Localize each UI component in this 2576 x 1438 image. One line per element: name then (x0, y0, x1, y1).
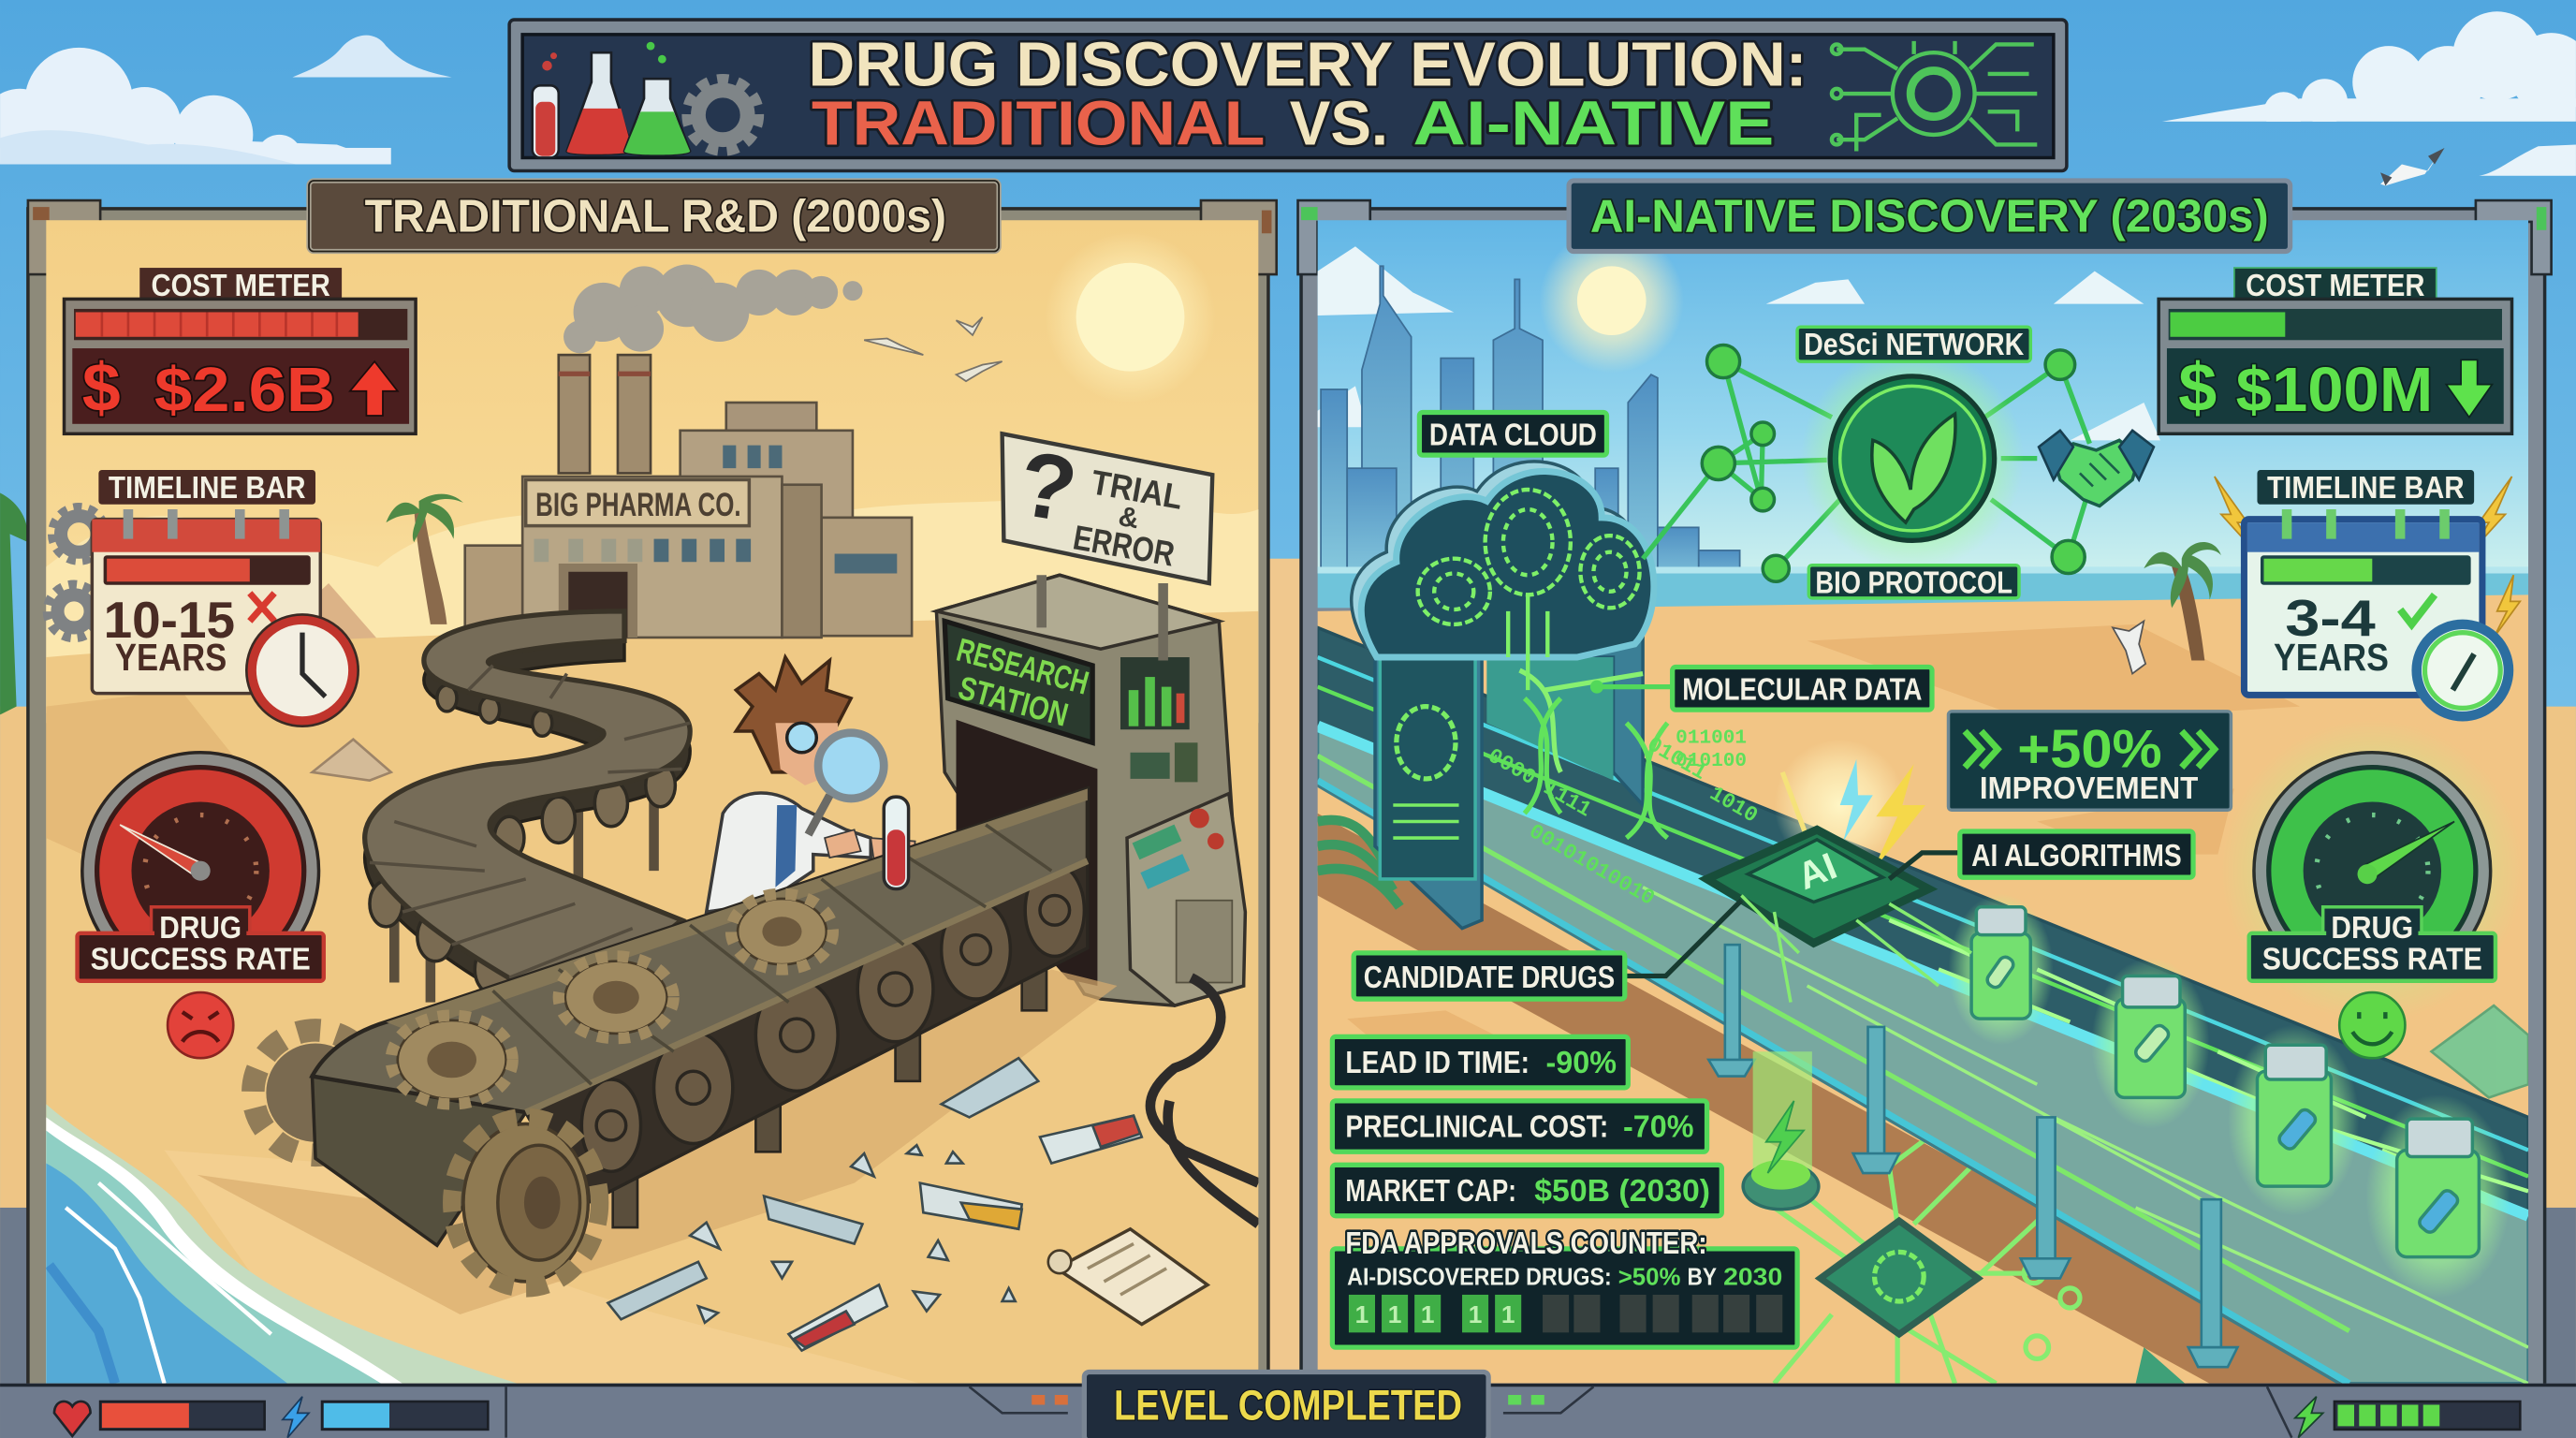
bar (2169, 309, 2502, 340)
glowing conveyor (1318, 627, 2528, 1384)
value: YEARS (115, 636, 227, 679)
icon: circuit chip (1832, 41, 2037, 151)
title banner (509, 20, 2067, 171)
label: molecular data (1590, 668, 1932, 710)
AI chip: AI (1792, 844, 1842, 898)
panel header: AI-native: AI-NATIVE DISCOVERY (2030s) (1590, 191, 2269, 242)
status bars (1120, 657, 1190, 729)
icon: seagull (2380, 148, 2445, 185)
stat: market cap: $50B (2030) (1534, 1174, 1710, 1209)
power cable (1150, 977, 1258, 1224)
data cloud server: 1010 (1705, 782, 1762, 829)
belt surface (1318, 627, 2528, 1212)
seagull (2113, 621, 2145, 674)
opening (956, 720, 1097, 986)
factory: Big Pharma Co. (465, 355, 912, 638)
broken vials and shards (607, 1058, 1142, 1351)
stat: lead ID time: -90% (1546, 1046, 1617, 1080)
icon: red X (250, 594, 274, 621)
bar (104, 555, 311, 585)
stat: market cap (1332, 1165, 1721, 1216)
stat: preclinical cost: PRECLINICAL COST: (1345, 1109, 1608, 1144)
energy bar (322, 1401, 488, 1430)
icon: green bolt (2295, 1397, 2323, 1438)
icon: smiling face (2339, 992, 2405, 1058)
value: $2.6B (154, 356, 335, 425)
counter cells: 1 (1469, 1300, 1482, 1328)
data cloud server (1318, 462, 1762, 929)
DNA helices (1525, 698, 1667, 838)
bar (2261, 555, 2471, 585)
title text: DRUG DISCOVERY EVOLUTION: (809, 30, 1808, 99)
rock (313, 740, 391, 781)
icon: bio protocol leaf coin (1801, 346, 2024, 570)
label: AI algorithms: AI ALGORITHMS (1971, 839, 2182, 873)
sea (1318, 566, 2528, 608)
research station machine (936, 575, 1245, 1005)
sand (1318, 594, 2528, 1384)
sky (1318, 220, 2528, 574)
value: 3-4 (2285, 590, 2376, 647)
gauge: AI-native success rate (2221, 720, 2524, 1058)
front gear (452, 1117, 600, 1288)
AI chip (1707, 829, 1971, 1003)
rear conveyor belt (365, 611, 707, 1030)
cost meter: traditional (65, 268, 416, 433)
icon: handshake (2039, 431, 2154, 506)
belt end (313, 1077, 526, 1245)
panel header: traditional (309, 181, 999, 252)
icon: clock (246, 614, 359, 726)
belt side with rollers (526, 861, 1088, 1208)
calendar (2244, 509, 2482, 695)
label: DeSci network: DeSci NETWORK (1804, 328, 2024, 362)
label: TIMELINE BAR (2267, 471, 2465, 506)
label: molecular data: MOLECULAR DATA (1682, 673, 1922, 708)
circuit traces on sand (1774, 1117, 2080, 1384)
energy capsule (1743, 1051, 1819, 1210)
stat: preclinical cost: -70% (1623, 1109, 1693, 1144)
sign: Big Pharma Co. (526, 479, 749, 526)
test tube (884, 797, 909, 888)
FDA approvals counter: FDA APPROVALS COUNTER: (1345, 1226, 1707, 1261)
desert sky (46, 220, 1258, 713)
sign: Trial & Error: ? (1012, 431, 1084, 542)
label: data cloud: DATA CLOUD (1429, 418, 1597, 453)
value: YEARS (2274, 636, 2389, 679)
callout: +50% improvement: +50% (2017, 720, 2162, 780)
label: SUCCESS RATE (2262, 942, 2482, 976)
counter cells: 1 (1388, 1300, 1401, 1328)
label: SUCCESS RATE (91, 942, 311, 976)
network lines: DeSci (1643, 361, 2089, 568)
value (104, 592, 235, 679)
icon: flasks and gear (533, 42, 759, 157)
rear gear (253, 1030, 378, 1155)
value: 10-15 (104, 592, 235, 649)
value (2167, 348, 2504, 426)
control panel (1127, 794, 1245, 1005)
FDA approvals counter: BY (1687, 1262, 1717, 1290)
icon: check (2400, 594, 2435, 624)
panel: AI-native discovery (1298, 200, 2552, 1388)
title banner: AI-NATIVE (1412, 89, 1774, 158)
data cloud (1352, 462, 1654, 690)
data cloud server: 00101010010 (1525, 819, 1659, 911)
sand ground (46, 611, 1258, 1384)
stat: lead ID time (1332, 1036, 1628, 1088)
level completed badge (1084, 1372, 1488, 1438)
icon: gears (48, 507, 105, 638)
counter cells: 1 (1421, 1300, 1434, 1328)
counter cells (1349, 1295, 1782, 1332)
bottom HUD bar (0, 1372, 2576, 1438)
level completed badge: LEVEL COMPLETED (1114, 1381, 1462, 1429)
panel frame (1298, 200, 2552, 1388)
sign: Big Pharma Co.: BIG PHARMA CO. (535, 487, 741, 523)
label: DRUG (2331, 911, 2413, 946)
data cloud server: 01011 (1643, 732, 1710, 785)
counter cells: 1 (1355, 1300, 1368, 1328)
value: $100M (2236, 356, 2433, 425)
FDA approvals counter: 2030 (1723, 1262, 1782, 1290)
FDA approvals counter: AI-DISCOVERED DRUGS: (1347, 1262, 1612, 1290)
neon streaks (1318, 657, 2528, 1212)
stat: market cap: MARKET CAP: (1345, 1174, 1516, 1209)
icon: clock (2417, 624, 2509, 716)
cyan rail (1318, 726, 2528, 1216)
clouds (1318, 246, 2160, 440)
sign: Trial & Error: TRIAL (1089, 462, 1186, 517)
rear belt shadow and side (365, 631, 707, 1030)
brain chip (1821, 1221, 1978, 1334)
title banner: TRADITIONAL (812, 89, 1265, 158)
sun (1054, 241, 1206, 391)
label: candidate drugs: CANDIDATE DRUGS (1364, 961, 1615, 995)
screen: Research Station: RESEARCH (953, 632, 1092, 702)
title banner: VS. (1290, 89, 1388, 158)
desert dunes (46, 493, 1258, 723)
scientist (707, 657, 915, 912)
gears on belt (398, 899, 827, 1099)
panel header: AI-native (1569, 181, 2291, 252)
label: TIMELINE BAR (109, 471, 305, 506)
label: COST METER (2246, 269, 2424, 303)
icon: sad face (168, 992, 233, 1058)
scroll (1048, 1229, 1208, 1325)
label: data cloud (1419, 413, 1606, 455)
label (2249, 907, 2496, 981)
health bar (100, 1401, 265, 1430)
brown belt shadow (1318, 814, 2365, 1384)
stat: preclinical cost (1332, 1101, 1707, 1152)
city skyline (1321, 266, 1740, 594)
icon: lightning bolts (2215, 477, 2520, 638)
smoke (564, 265, 862, 353)
data cloud server: 010100 (1676, 750, 1747, 772)
panel header: traditional: TRADITIONAL R&D (2000s) (365, 191, 946, 242)
gauge: traditional success rate (78, 753, 324, 1058)
value: $ (82, 348, 121, 426)
FDA approvals counter: >50% (1618, 1262, 1680, 1290)
lightning bolts (1774, 740, 1925, 871)
screen: Research Station: STATION (955, 669, 1072, 734)
counter cells: 1 (1501, 1300, 1515, 1328)
icon: network nodes (1702, 345, 2085, 581)
sign: Trial & Error (1003, 431, 1212, 661)
label: bio protocol: BIO PROTOCOL (1815, 566, 2012, 601)
vial glows (1949, 894, 2510, 1298)
callout: +50% improvement (1949, 712, 2231, 810)
value: $ (2178, 348, 2217, 426)
front conveyor belt (198, 788, 1117, 1314)
magnifying glass (809, 733, 884, 835)
panel frame (28, 200, 1277, 1388)
bar (74, 309, 407, 340)
vials (1971, 907, 2479, 1257)
cost meter: AI-native (2159, 268, 2511, 433)
sign: Trial & Error: & (1116, 501, 1141, 535)
needle (2365, 822, 2454, 877)
FDA approvals counter (1332, 1226, 1797, 1347)
value (72, 348, 409, 426)
label: COST METER (152, 269, 330, 303)
label (78, 907, 324, 981)
label: AI algorithms (1889, 831, 2193, 879)
panel: traditional R&D (28, 200, 1277, 1388)
palm tree (386, 494, 463, 624)
icon: heart (54, 1401, 91, 1436)
calendar (92, 509, 320, 694)
rear belt surface (365, 611, 690, 1010)
support pillars (1708, 945, 2237, 1367)
sun (1540, 228, 1684, 373)
timeline bar: traditional (48, 470, 359, 726)
AI progress bar (2334, 1401, 2520, 1430)
sea and foam (46, 1104, 518, 1384)
value (2274, 590, 2389, 679)
palm tree (2144, 542, 2221, 661)
belt side (1318, 723, 2528, 1384)
timeline bar: AI-native (2215, 470, 2520, 716)
screen: Research Station (944, 632, 1092, 737)
label: DRUG (159, 911, 242, 946)
callout: +50% improvement: IMPROVEMENT (1980, 771, 2198, 806)
binary streams: 011001 (1676, 726, 1747, 749)
data cloud server: 0000 1111 (1484, 743, 1595, 822)
clouds (0, 11, 2576, 181)
sign: Trial & Error: ERROR (1070, 518, 1178, 574)
belt top (313, 788, 1088, 1112)
needle (120, 825, 204, 877)
icon: energy bolt (283, 1397, 309, 1438)
stat: lead ID time: LEAD ID TIME: (1345, 1046, 1530, 1080)
corner chip (2136, 1347, 2185, 1384)
label: candidate drugs (1354, 901, 1741, 999)
birds (864, 317, 1003, 381)
